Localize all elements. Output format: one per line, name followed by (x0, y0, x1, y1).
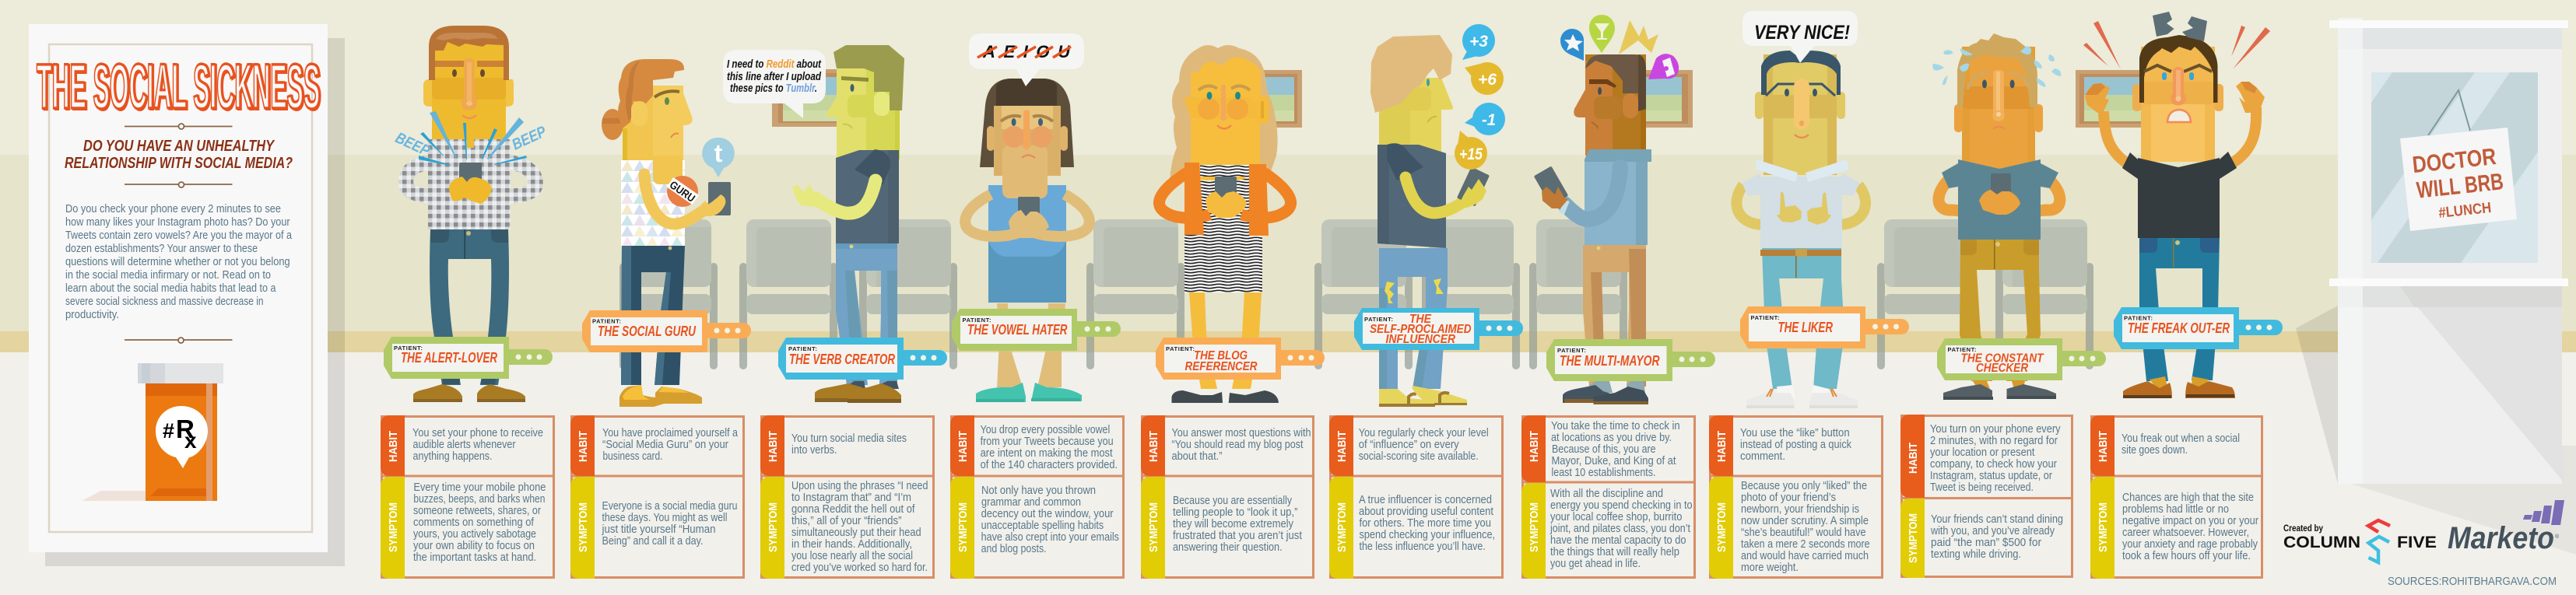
panel: card 7 habit and symptom: Mayor, Duke, and King of at (1552, 455, 1676, 467)
title (37, 51, 321, 123)
panel: card 8 habit and symptom: taken a mere 2 seconds more (1741, 538, 1870, 551)
patient tag: the constant checker: THE CONSTANT (1961, 352, 2044, 366)
patient 2: the social guru (602, 59, 735, 407)
panel: card 3 habit and symptom: to Instagram that” and “I’m (791, 492, 911, 504)
panel: card 3 habit and symptom: you lose nearly all the social (791, 550, 913, 562)
patient tag: the blog referencer: PATIENT: (1166, 345, 1195, 352)
panel: card 10 habit and symptom: problems had little or no (2122, 503, 2229, 516)
credits: column five logo (2283, 520, 2437, 562)
patient tag: the social guru: THE SOCIAL GURU (598, 324, 697, 339)
speech bubble: crossed-out vowels (969, 33, 1084, 86)
callouts: influence score bubbles: +6 (1478, 71, 1497, 89)
panel: card 7 habit and symptom: your local coffee shop, burrito (1550, 511, 1682, 523)
patient tag: the alert-lover: PATIENT: (394, 345, 423, 352)
patient tag: the vowel hater: PATIENT: (962, 317, 991, 324)
speech bubble: reddit and tumblr (723, 50, 826, 118)
panel: card 7 habit and symptom: energy you spend checking in to (1550, 499, 1693, 512)
panel: card 4 habit and symptom: HABIT (956, 431, 970, 462)
speech bubble: reddit and tumblr: this line after I upload (727, 70, 822, 83)
intro text block: learn about the social media habits that lead to a (65, 282, 276, 295)
intro text block: Tweets contain zero vowels? Are you the mayor of a (65, 229, 293, 242)
icon: anger rays (2083, 21, 2270, 69)
panel: card 4 habit and symptom: grammar and common (981, 496, 1081, 509)
patient 8: the liker (1736, 11, 1865, 408)
panel: card 9 habit and symptom: company, to check how your (1930, 458, 2057, 471)
panel: card 1 habit and symptom: You set your phone to receive (412, 427, 543, 439)
panel: card 8 habit and symptom: Because you only “liked” the (1741, 480, 1867, 492)
patient 6: the self-proclaimed influencer (1370, 24, 1505, 407)
panel: card 8 habit and symptom: SYMPTOM (1715, 502, 1728, 552)
panel: card 5 habit and symptom: telling people to “look it up,” (1173, 506, 1298, 519)
patient tag: the blog referencer: REFERENCER (1184, 360, 1258, 373)
panel: card 8 habit and symptom: newborn, your friendship is (1741, 503, 1859, 516)
panel: card 5 habit and symptom: SYMPTOM (1147, 502, 1160, 552)
patient tag: the vowel hater (952, 309, 1121, 351)
patient 9: the constant checker (1932, 33, 2061, 400)
panel: card 2 habit and symptom: these days. You might as well (602, 512, 727, 524)
panel: card 4 habit and symptom: unacceptable spelling habits (981, 520, 1104, 532)
door sign: doctor will brb: WILL BRB (2416, 169, 2504, 204)
panel: card 6 habit and symptom: spend checking your influence, (1359, 529, 1495, 541)
patient tag: the verb creator: THE VERB CREATOR (789, 352, 895, 367)
intro text block (65, 202, 293, 321)
speech bubble: very nice (1742, 11, 1858, 63)
panel: card 3 habit and symptom: HABIT (767, 431, 780, 462)
panel: card 9 habit and symptom: 2 minutes, with no regard for (1930, 435, 2058, 447)
panel: card 6 habit and symptom: A true influencer is concerned (1359, 494, 1492, 506)
patient tag: the self-proclaimed influencer: SELF-PROCLAIMED (1370, 323, 1472, 336)
patient tag: the constant checker: CHECKER (1976, 362, 2028, 375)
panel: card 3 habit and symptom: into verbs. (791, 444, 837, 457)
panel: card 1 habit and symptom: buzzes, beeps, and barks when (413, 493, 545, 506)
panel: card 3 habit and symptom: You turn social media sites (791, 432, 907, 445)
panel: card 6 habit and symptom: of “influence” on every (1359, 439, 1459, 451)
panel: card 8 habit and symptom: comment. (1740, 450, 1785, 463)
panel: card 4 habit and symptom: Not only have you thrown (981, 485, 1096, 497)
panel: card 3 habit and symptom: cred you’ve worked so hard for. (791, 562, 928, 574)
panel: card 4 habit and symptom: You drop every possible vowel (981, 424, 1110, 436)
panel: card 2 habit and symptom: business card. (602, 450, 663, 463)
icon: tumblr bubble: t (714, 139, 723, 167)
patient tag: the liker (1740, 306, 1909, 348)
icon: #Rx pill bottle (82, 363, 223, 501)
patient tag: the multi-mayor: THE MULTI-MAYOR (1560, 353, 1659, 369)
heading: unhealthy relationship question: RELATIONSHIP WITH SOCIAL MEDIA? (65, 155, 293, 172)
panel: card 4 habit and symptom: have also crept into your emails (981, 531, 1119, 544)
intro text block: severe social sickness and massive decrease in (65, 295, 264, 308)
panel: card 7 habit and symptom: joint, and pilates class, you don’t (1549, 523, 1690, 535)
panel: card 4 habit and symptom: SYMPTOM (956, 502, 970, 552)
patient 10: the freak out-er (2083, 12, 2270, 398)
panel: card 6 habit and symptom: HABIT (1335, 431, 1349, 462)
panel: card 8 habit and symptom: HABIT (1715, 431, 1728, 462)
patient tag: the verb creator (778, 338, 947, 380)
intro text block: how many likes your Instagram photo has? Do your (65, 215, 290, 229)
speech bubble: reddit and tumblr: these pics to Tumblr. (730, 82, 817, 95)
panel: card 1 habit and symptom: your own ability to focus on (413, 540, 535, 552)
panel: card 5 habit and symptom: they will become extremely (1173, 518, 1294, 530)
heading: unhealthy relationship question: DO YOU HAVE AN UNHEALTHY (83, 138, 275, 155)
patient 1: the alert-lover (393, 26, 549, 402)
patient tag: the liker: THE LIKER (1778, 320, 1833, 335)
waiting room chairs (619, 219, 2093, 369)
patient tag: the social guru: PATIENT: (592, 317, 621, 325)
panel: card 10 habit and symptom (2090, 415, 2263, 579)
panel: card 7 habit and symptom: You take the time to check in (1551, 420, 1680, 432)
patient tag: the self-proclaimed influencer: THE (1409, 313, 1432, 326)
icon: #Rx pill bottle: x (184, 429, 197, 453)
icon: beep alert rays: BEEP (393, 129, 433, 160)
patient tag: the blog referencer: THE BLOG (1194, 349, 1248, 362)
intro text block: dozen establishments? Your answer to these (65, 242, 258, 255)
credits: marketo logo: ® (2555, 534, 2560, 540)
panel: card 3 habit and symptom: Upon using the phrases “I need (791, 480, 928, 492)
patient tag: the self-proclaimed influencer: PATIENT: (1364, 316, 1393, 323)
panel: card 1 habit and symptom: Every time your mobile phone (413, 481, 546, 494)
panel: card 8 habit and symptom: now under scrutiny. A simple (1741, 515, 1869, 527)
panel: card 3 habit and symptom: SYMPTOM (767, 502, 780, 552)
panel: card 7 habit and symptom: have the mental capacity to do (1550, 534, 1686, 547)
panel: card 7 habit and symptom: SYMPTOM (1528, 502, 1541, 552)
panel: card 8 habit and symptom: photo of your friend’s (1741, 492, 1836, 504)
panel: card 8 habit and symptom (1709, 415, 1883, 579)
credits: column five logo: FIVE (2397, 534, 2437, 551)
panel: card 3 habit and symptom: simultaneously put their head (791, 527, 921, 539)
panel: card 1 habit and symptom: someone retweets, shares, or (413, 505, 541, 517)
icon: beep alert rays (393, 111, 549, 166)
panel: card 1 habit and symptom: anything happens. (412, 450, 492, 463)
panel: card 6 habit and symptom: You regularly check your level (1359, 427, 1489, 439)
panel: card 2 habit and symptom: SYMPTOM (577, 502, 590, 552)
callouts: influence score bubbles: +15 (1459, 145, 1483, 163)
callouts: influence score bubbles (1455, 24, 1505, 170)
door sign: doctor will brb (2400, 90, 2517, 231)
patient tag: the verb creator: PATIENT: (788, 345, 817, 352)
panel: card 1 habit and symptom: audible alerts whenever (412, 439, 516, 451)
intro text block: Do you check your phone every 2 minutes to see (65, 202, 281, 215)
speech bubble: reddit and tumblr: I need to Reddit about (727, 58, 822, 71)
patient 5: the blog referencer (1159, 45, 1291, 403)
panel: card 7 habit and symptom: the things that will really help (1550, 546, 1679, 558)
panel: card 10 habit and symptom: your anxiety and rage probably (2122, 538, 2258, 551)
panel: card 3 habit and symptom: this,” all of your “friends” (791, 515, 902, 527)
patient tag: the self-proclaimed influencer (1354, 308, 1523, 350)
text: THE SOCIAL SICKNESS (38, 52, 321, 123)
icon: beep alert rays: BEEP (510, 123, 549, 154)
sources line: SOURCES:ROHITBHARGAVA.COM (2388, 575, 2557, 588)
panel: card 7 habit and symptom: With all the discipline and (1550, 488, 1663, 500)
panel: card 2 habit and symptom: You have proclaimed yourself a (602, 427, 739, 439)
panel: card 7 habit and symptom: HABIT (1528, 431, 1541, 462)
panel: card 9 habit and symptom: HABIT (1907, 443, 1920, 474)
panel: card 9 habit and symptom: your location or present (1930, 446, 2034, 459)
panel: card 8 habit and symptom: instead of posting a quick (1740, 439, 1852, 451)
patient tag: the social guru (582, 310, 751, 352)
panel: card 10 habit and symptom: HABIT (2097, 431, 2110, 462)
patient tag: the constant checker: PATIENT: (1947, 346, 1977, 353)
panel: card 10 habit and symptom: negative impact on you or your (2122, 515, 2258, 527)
icon: tumblr bubble (702, 138, 735, 177)
panel: card 5 habit and symptom: “You should read my blog post (1172, 439, 1303, 451)
panel: card 8 habit and symptom: “she’s beautiful!” would have (1741, 527, 1866, 539)
speech bubble: crossed-out vowels: AEIOU (982, 42, 1071, 61)
patient tag: the self-proclaimed influencer: INFLUENCER (1385, 333, 1455, 346)
panel: card 5 habit and symptom (1141, 415, 1314, 579)
panel: card 9 habit and symptom: texting while driving. (1931, 548, 2021, 561)
panel: card 2 habit and symptom (570, 415, 745, 579)
panel: card 8 habit and symptom: You use the “like” button (1740, 427, 1850, 439)
panel: card 2 habit and symptom: “Social Media Guru” on your (602, 439, 728, 451)
panel: card 10 habit and symptom: took a few hours off your life. (2122, 550, 2251, 562)
panel: card 4 habit and symptom: from your Tweets because you (981, 436, 1114, 448)
panel: card 10 habit and symptom: Chances are high that the site (2122, 492, 2254, 504)
credits: marketo logo (2448, 500, 2564, 555)
callouts: influence score bubbles: +3 (1469, 33, 1488, 51)
panel: card 8 habit and symptom: more weight. (1741, 562, 1799, 574)
patient tag: the freak out-er: PATIENT: (2124, 314, 2153, 322)
panel: card 7 habit and symptom: least 10 establishments. (1552, 467, 1656, 479)
panel: card 8 habit and symptom: and would have carried much (1741, 550, 1869, 562)
panel: card 9 habit and symptom: You turn on your phone every (1930, 423, 2061, 436)
panel: card 2 habit and symptom: Being” and call it a day. (602, 535, 704, 548)
panel: card 5 habit and symptom: HABIT (1147, 431, 1160, 462)
panel: card 5 habit and symptom: Because you are essentially (1173, 495, 1293, 507)
speech bubble: very nice: VERY NICE! (1754, 22, 1850, 44)
icon: #Rx pill bottle: R (176, 415, 195, 443)
panel: card 10 habit and symptom: SYMPTOM (2097, 502, 2110, 552)
panel: card 1 habit and symptom: comments on something of (413, 516, 535, 529)
panel: introduction (29, 24, 345, 566)
door sign: doctor will brb: #LUNCH (2437, 200, 2492, 222)
panel: card 9 habit and symptom: Tweet is being received. (1930, 481, 2034, 494)
patient tag: the multi-mayor: PATIENT: (1557, 347, 1586, 354)
intro text block: productivity. (65, 308, 119, 321)
wall pictures (772, 69, 2163, 128)
panel: card 6 habit and symptom: for others. The more time you (1359, 517, 1491, 530)
panel: card 9 habit and symptom: Instagram, status update, or (1930, 470, 2052, 482)
icon: sweat drops (1932, 47, 2061, 87)
patient 3: the verb creator (723, 45, 904, 403)
panel: card 6 habit and symptom: social-scoring site available. (1359, 450, 1479, 463)
panel: card 6 habit and symptom (1329, 415, 1504, 579)
patient tag: the freak out-er (2114, 307, 2283, 349)
panel: card 1 habit and symptom (381, 415, 555, 579)
panel: card 4 habit and symptom: and blog posts. (981, 543, 1047, 555)
patient tag: the vowel hater: THE VOWEL HATER (967, 322, 1068, 338)
patient 7: the multi-mayor (1534, 15, 1679, 404)
text: THE SOCIAL SICKNESS (37, 51, 320, 122)
panel: card 1 habit and symptom: SYMPTOM (387, 502, 400, 552)
icons: location check-in pins (1560, 15, 1679, 79)
panel: card 5 habit and symptom: frustrated that you aren’t just (1173, 530, 1302, 542)
panel: card 1 habit and symptom: yours, you actively sabotage (413, 528, 536, 541)
intro text block: questions will determine whether or not you belong (65, 255, 290, 268)
patient tag: the constant checker (1937, 338, 2106, 380)
panel: card 7 habit and symptom: at locations as you drive by. (1551, 432, 1672, 444)
panel: card 2 habit and symptom: just title yourself “Human (602, 523, 716, 536)
intro text block: in the social media infirmary or not. Read on to (65, 268, 271, 282)
panel: card 7 habit and symptom (1521, 415, 1696, 579)
panel: card 1 habit and symptom: the important tasks at hand. (413, 551, 536, 564)
patient tag: the alert-lover: THE ALERT-LOVER (401, 350, 497, 366)
panel: card 5 habit and symptom: You answer most questions with (1172, 427, 1311, 439)
patient tag: the freak out-er: THE FREAK OUT-ER (2128, 320, 2230, 336)
panel: card 3 habit and symptom: in their hands. Additionally, (791, 538, 912, 551)
door sign: doctor will brb: DOCTOR (2411, 144, 2497, 178)
patient tag: the blog referencer (1156, 338, 1325, 380)
panel: card 3 habit and symptom (760, 415, 935, 579)
panel: card 4 habit and symptom: decency out the window, your (981, 508, 1114, 520)
panel: card 9 habit and symptom: with you, and you’ve already (1930, 525, 2055, 537)
panel: card 1 habit and symptom: HABIT (387, 431, 400, 462)
icon: #Rx pill bottle: # (163, 419, 174, 443)
patient 4: the vowel hater (965, 33, 1090, 402)
panel: card 10 habit and symptom: You freak out when a social (2122, 432, 2240, 445)
panel: card 4 habit and symptom (950, 415, 1125, 579)
panel: card 3 habit and symptom: gonna Reddit the hell out of (791, 503, 915, 516)
panel: card 10 habit and symptom: site goes down. (2122, 444, 2188, 457)
panel: card 9 habit and symptom: SYMPTOM (1907, 513, 1920, 563)
panel: card 2 habit and symptom: HABIT (577, 431, 590, 462)
panel: card 7 habit and symptom: you get ahead in life. (1550, 558, 1641, 570)
panel: card 6 habit and symptom: the less influence you’ll have. (1359, 541, 1486, 553)
credits: marketo logo: Marketo (2448, 521, 2554, 555)
icon: broken phone (2153, 12, 2207, 41)
panel: card 2 habit and symptom: Everyone is a social media guru (602, 500, 738, 513)
panel: card 7 habit and symptom: Because of this, you are (1552, 443, 1656, 456)
panel: card 9 habit and symptom (1900, 415, 2073, 578)
panel: card 5 habit and symptom: answering their question. (1173, 541, 1283, 554)
panel: card 6 habit and symptom: about providing useful content (1359, 506, 1493, 518)
callouts: influence score bubbles: -1 (1482, 111, 1496, 129)
heading: unhealthy relationship question (65, 138, 293, 172)
panel: card 10 habit and symptom: career whatsoever. However, (2122, 527, 2249, 539)
credits: column five logo: Created by (2283, 523, 2323, 534)
patient tag: the alert-lover (384, 337, 553, 379)
patient tag: the liker: PATIENT: (1751, 314, 1779, 321)
panel: card 9 habit and symptom: paid “the man” $500 for (1931, 537, 2041, 549)
doctor's office door (2296, 18, 2576, 555)
panel: card 5 habit and symptom: about that.” (1172, 450, 1223, 463)
panel: card 4 habit and symptom: are intent on making the most (981, 447, 1113, 460)
panel: card 4 habit and symptom: of the 140 characters provided. (981, 459, 1118, 471)
panel: card 9 habit and symptom: Your friends can’t stand dining (1931, 513, 2063, 526)
icon: guru badge: GURU (668, 178, 697, 205)
patient tag: the multi-mayor (1546, 339, 1715, 381)
credits: column five logo: COLUMN (2283, 534, 2360, 551)
panel: card 6 habit and symptom: SYMPTOM (1335, 502, 1349, 552)
